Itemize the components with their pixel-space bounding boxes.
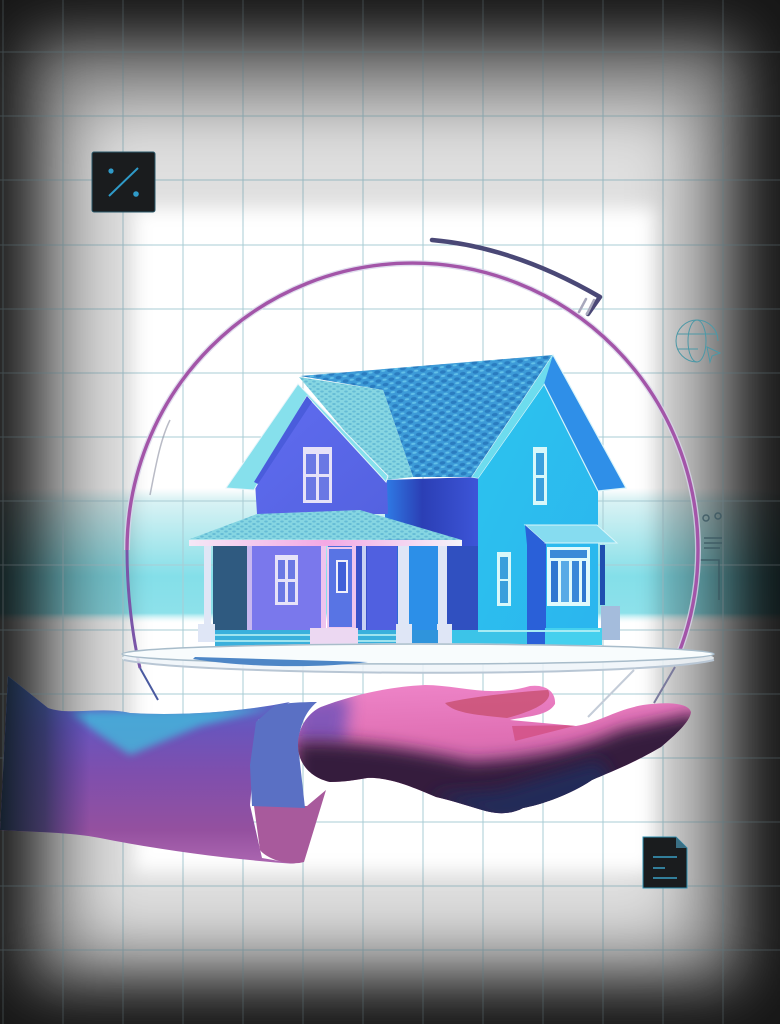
dark arc above dome	[432, 240, 600, 314]
left gable wall	[255, 396, 388, 514]
bay wall shade	[527, 543, 546, 645]
porch wall	[213, 546, 478, 630]
icon: document badge	[643, 837, 687, 888]
shirt cuff opening	[254, 790, 326, 863]
main blue roof	[300, 355, 553, 477]
porch columns	[198, 546, 452, 650]
sleeve	[0, 670, 300, 870]
middle recessed wall	[385, 477, 478, 635]
house	[189, 355, 626, 650]
icon: percent badge	[92, 152, 155, 212]
bay awning	[525, 525, 617, 543]
glass dome outline	[127, 263, 698, 717]
door	[328, 548, 355, 628]
thumb shade	[445, 690, 549, 718]
glass platform	[122, 643, 714, 673]
light dormer roof	[299, 377, 413, 480]
porch steps and foundation	[215, 628, 602, 649]
window: porch	[275, 555, 298, 605]
wrist purple tint	[295, 695, 350, 745]
shirt cuff	[250, 702, 317, 808]
hand shadow	[295, 712, 700, 820]
hand	[298, 685, 691, 814]
right wall	[478, 372, 598, 640]
window: upper right	[533, 447, 547, 505]
side steps	[601, 606, 620, 640]
side post	[600, 545, 605, 605]
icon: globe with cursor	[676, 320, 720, 362]
sleeve left fade	[0, 676, 86, 836]
right gable trim	[472, 355, 626, 491]
icon: faint side marks	[700, 513, 722, 600]
sleeve highlight	[70, 708, 270, 755]
palm crease	[512, 725, 578, 741]
teal band	[0, 488, 780, 624]
window: gable	[303, 447, 332, 503]
porch roof	[190, 510, 462, 540]
porch roof fascia	[189, 540, 462, 546]
window: bay	[547, 547, 590, 606]
window: lower right small	[497, 552, 511, 606]
left gable trim	[226, 384, 388, 490]
hand lower shadow	[437, 759, 615, 814]
